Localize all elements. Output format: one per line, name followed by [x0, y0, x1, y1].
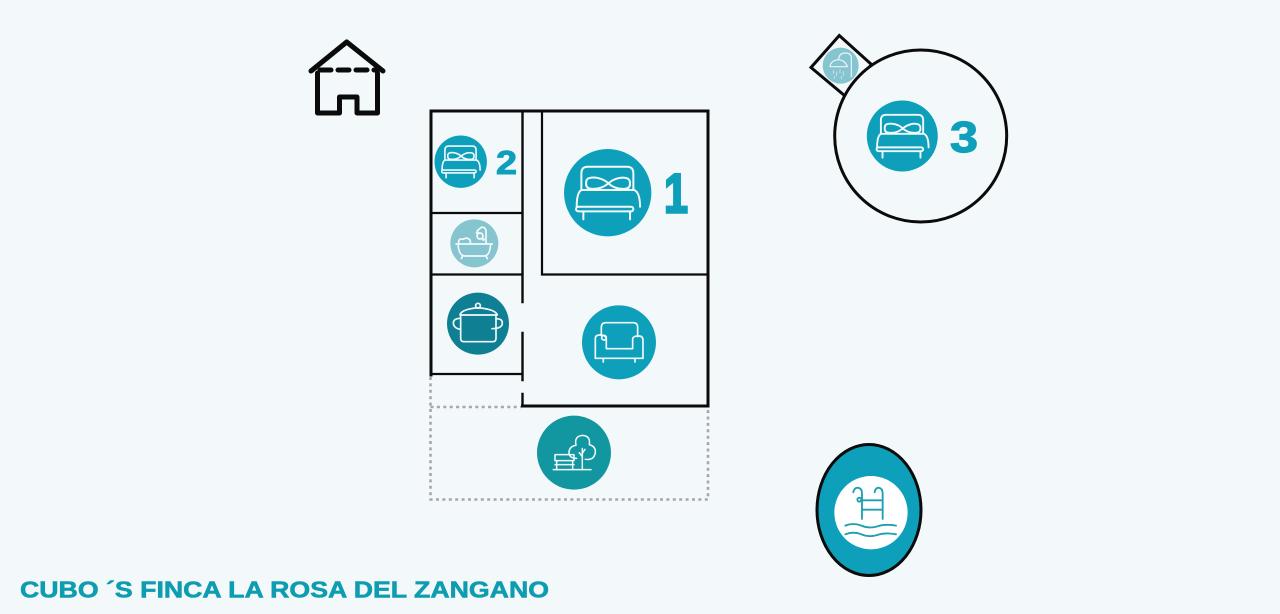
room: cabin 3 with round bedroom: [811, 36, 1007, 222]
room: bedroom 1: [564, 149, 688, 236]
icon: shower: [823, 48, 859, 84]
pool basin: [817, 444, 921, 576]
icon: cooking pot: [447, 293, 509, 355]
icon: bed 3: [867, 100, 938, 172]
icon: pool ladder and water: [834, 476, 908, 549]
number 3: 3: [950, 113, 978, 162]
pool: [817, 444, 921, 576]
round bedroom wall: [835, 50, 1007, 222]
room: bedroom 2: [434, 136, 517, 188]
terrace dotted outline: [430, 377, 708, 500]
title: CUBO ´S FINCA LA ROSA DEL ZANGANO: [20, 576, 549, 602]
icon: armchair: [582, 305, 656, 379]
number 1: 1: [664, 162, 688, 224]
floor plan walls: [431, 111, 708, 406]
number 2: 2: [496, 144, 517, 181]
icon: house: [311, 42, 383, 113]
icon: bed 1: [564, 149, 651, 236]
icon: bathtub: [450, 219, 498, 267]
icon: bed 2: [434, 136, 487, 188]
icon: garden with tree and bench: [537, 416, 611, 490]
bathroom annex diamond: [811, 36, 872, 96]
